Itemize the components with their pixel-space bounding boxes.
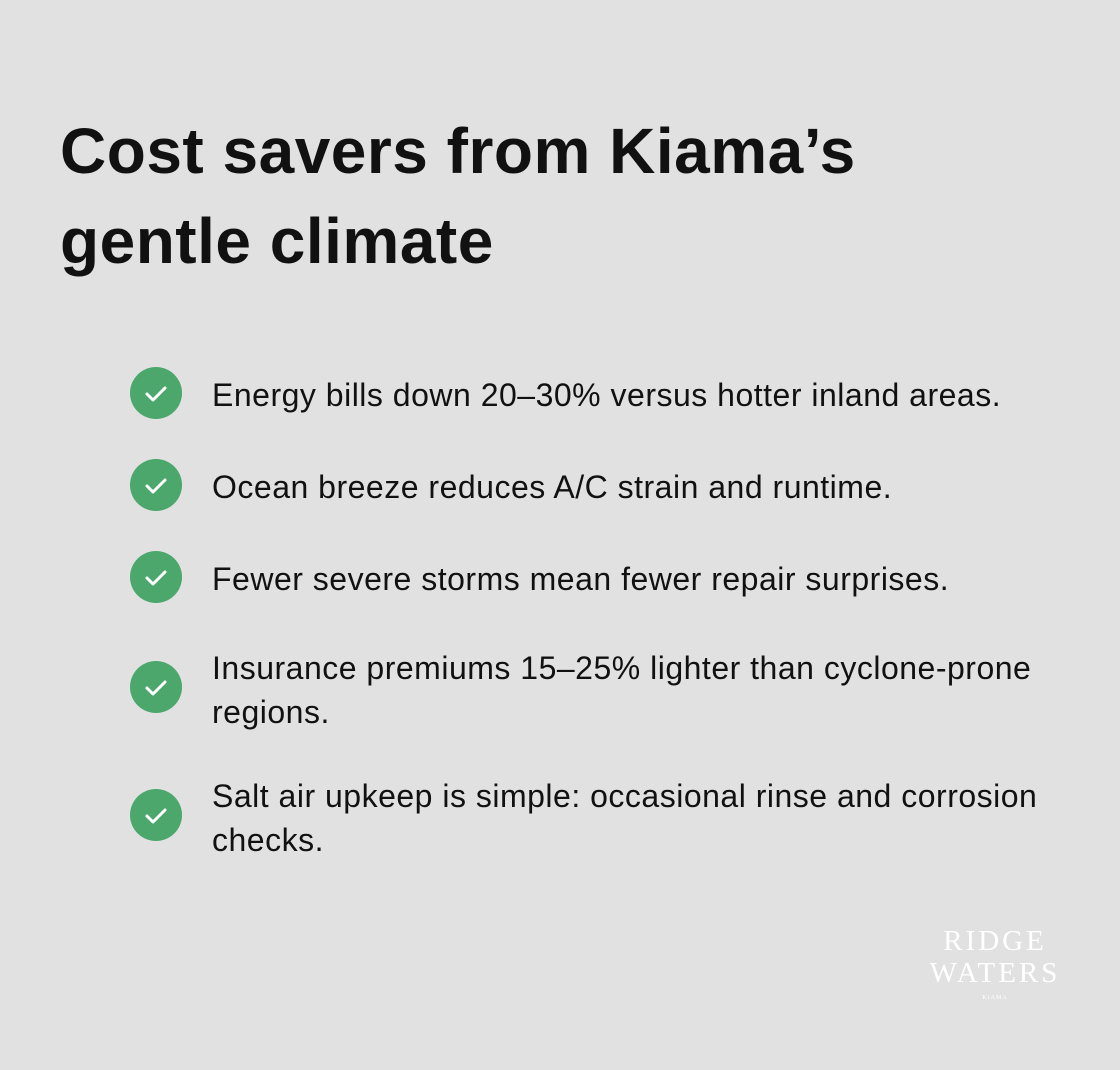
icon: check — [130, 459, 182, 511]
text — [212, 650, 1031, 730]
logo: KIAMA — [982, 995, 1008, 1001]
text: Energy bills down 20–30% versus hotter inland areas. — [212, 377, 1001, 413]
text: regions. — [212, 694, 330, 730]
text — [212, 778, 1037, 858]
text: Fewer severe storms mean fewer repair surprises. — [212, 561, 949, 597]
text: Salt air upkeep is simple: occasional rinse and corrosion — [212, 778, 1037, 814]
text: checks. — [212, 822, 324, 858]
logo: WATERS — [930, 957, 1060, 989]
logo — [930, 925, 1060, 1001]
item: storms — [130, 551, 949, 603]
icon: check — [130, 789, 182, 841]
item: ocean breeze — [130, 459, 892, 511]
item: salt air — [130, 778, 1037, 858]
text: Insurance premiums 15–25% lighter than cyclone-prone — [212, 650, 1031, 686]
icon: check — [130, 551, 182, 603]
text: Ocean breeze reduces A/C strain and runtime. — [212, 469, 892, 505]
item: energy bills — [130, 367, 1001, 419]
icon: check — [130, 367, 182, 419]
title: Cost savers from Kiama’s — [60, 115, 856, 187]
title — [60, 115, 856, 277]
logo: RIDGE — [943, 925, 1047, 957]
item: insurance — [130, 650, 1031, 730]
title: gentle climate — [60, 205, 494, 277]
icon: check — [130, 661, 182, 713]
